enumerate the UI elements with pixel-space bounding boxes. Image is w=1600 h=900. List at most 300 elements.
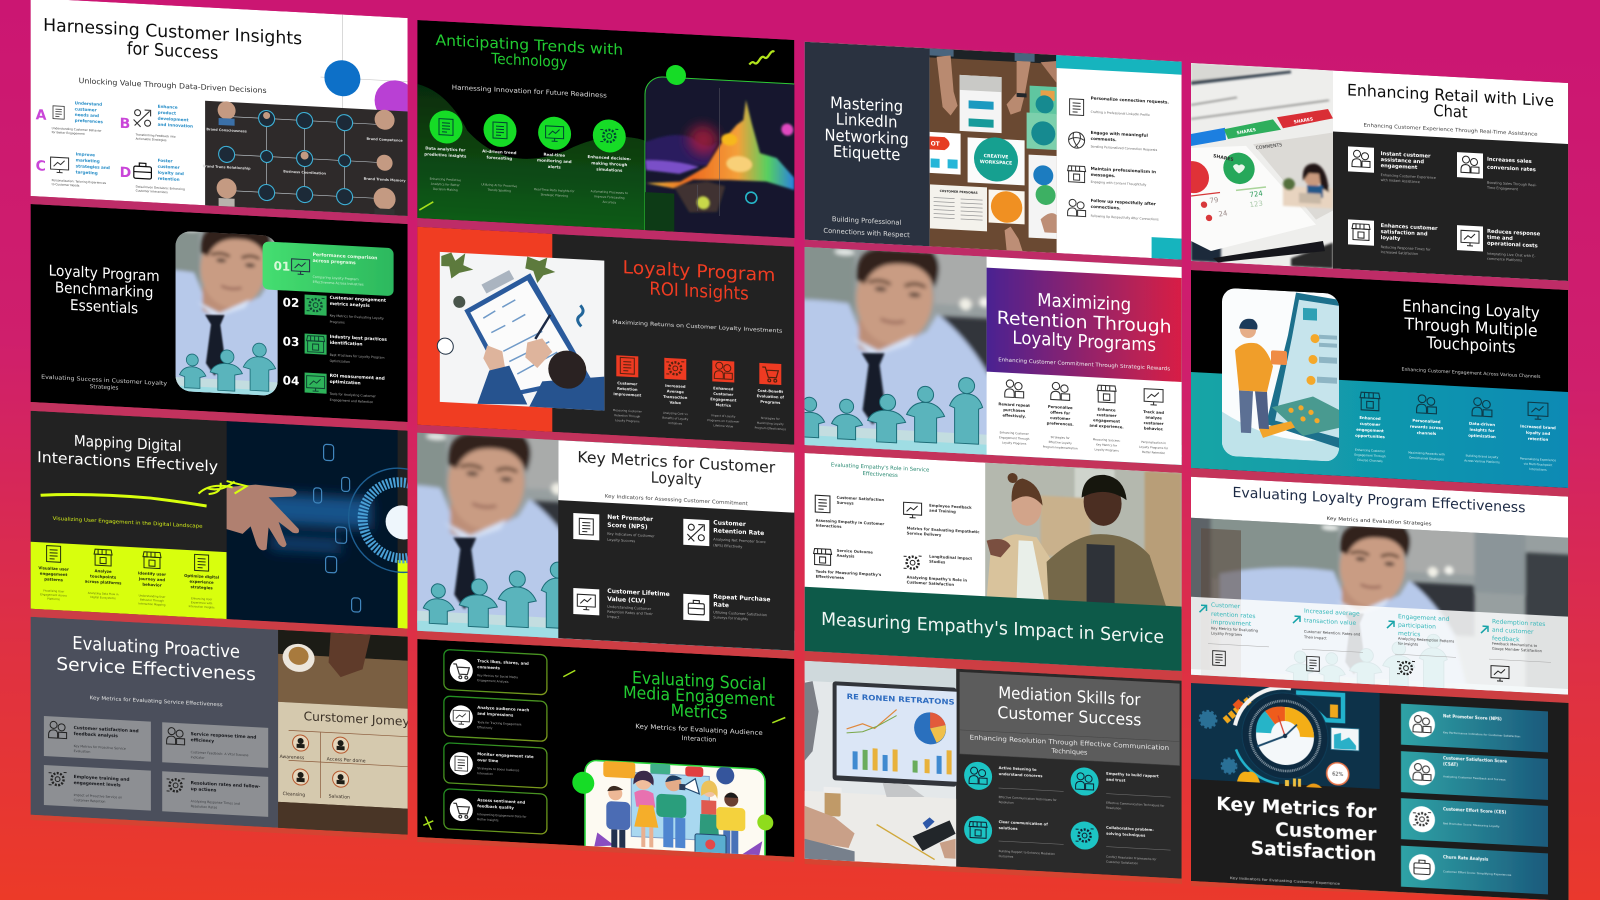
item grid: Surveys (837, 500, 854, 506)
metric cards: Customer Effort Score (CES) (1443, 806, 1506, 815)
item labels: Personalize (1048, 404, 1073, 410)
metric column 2: Their Impact (1303, 635, 1327, 641)
metric column 2 (1293, 607, 1363, 674)
panel: Evaluating Social Media slide (417, 639, 794, 891)
item details: Program Effectiveness (755, 426, 786, 431)
item labels: preferences. (1047, 420, 1074, 427)
item 02: Programs (330, 320, 345, 325)
item labels: offers for (1050, 410, 1070, 416)
title (997, 682, 1141, 730)
item grid: Service Outcome (837, 548, 873, 555)
title: LinkedIn (836, 110, 897, 132)
image: man with office background (1109, 462, 1600, 746)
title (56, 632, 256, 686)
feature cards: Enhances customer (1381, 223, 1438, 232)
image: customer journey on table: Curstomer Jomey (304, 709, 410, 729)
item labels: Optimize digital (184, 573, 219, 580)
item B: Enhance (158, 104, 178, 110)
metric cards: Analyzing Customer Feedback and Surveys (1443, 774, 1506, 782)
list cards: Assess sentiment and (477, 797, 526, 805)
highlighted item 01: 01 (274, 259, 290, 274)
item labels: Enhanced (713, 386, 734, 391)
item details: Strategies for (761, 416, 781, 421)
metric cards: Rate (713, 601, 729, 609)
subtitle: Techniques (1050, 747, 1088, 757)
metric cards: Analyzing Response Times and (191, 799, 240, 806)
item 04: optimization (330, 379, 361, 386)
title: ROI Insights (649, 279, 749, 305)
metric column 3: Analyzing Redemption Patterns (1398, 637, 1454, 644)
list cards: over time (477, 757, 499, 763)
item 03 (283, 331, 387, 366)
item details (999, 430, 1169, 455)
metric cards: Employee training and (74, 774, 130, 783)
metric cards: Net Promoter (607, 514, 653, 523)
skill items: Clear communication of (999, 820, 1048, 827)
title: Key Metrics for Customer (577, 449, 776, 477)
panel: Key Metrics for Customer Satisfaction slide (1191, 683, 1568, 900)
item labels (424, 145, 631, 173)
item details: Strategies for (1051, 435, 1071, 440)
metric cards: Analyzing Net Promoter Score (713, 537, 766, 544)
item labels: retention (1528, 436, 1548, 442)
title: Loyalty Program (49, 263, 160, 285)
title: Chat (1433, 101, 1468, 122)
item details: Engagement Through (999, 435, 1030, 441)
item grid: Analyzing Empathy's Role in (907, 574, 967, 583)
image: clipboard from above (437, 252, 604, 411)
title: Mediation Skills for (998, 682, 1141, 710)
item details: Building Brand Loyalty (1466, 454, 1499, 459)
metric column 2: transaction value (1304, 617, 1356, 627)
item B (120, 104, 193, 142)
item details: Digital Ecosystems (90, 595, 116, 600)
item grid: Customer Satisfaction (907, 579, 954, 587)
image: customer journey on table: Cleansing (283, 791, 305, 798)
item details: Omnichannel Strategies (1409, 456, 1444, 461)
image: blurred analytics screen: 123 (1249, 200, 1264, 209)
item labels: Increased (665, 384, 686, 389)
feature cards: conversion rates (1487, 165, 1536, 173)
item details: Interactions (1529, 467, 1547, 472)
side panel (805, 42, 930, 246)
list cards: comments (477, 664, 501, 670)
image: hand and digital interface (227, 421, 453, 631)
metric cards: Score (NPS) (607, 522, 648, 531)
item details: Maximizing Rewards with (1408, 451, 1445, 456)
item D: retention (158, 176, 180, 182)
item labels: predictive insights (424, 151, 467, 159)
image: customer journey on table (278, 630, 410, 835)
title: Evaluating Proactive (72, 633, 240, 663)
feature cards: Reduces response (1487, 229, 1541, 238)
teal band (1191, 372, 1568, 488)
title header (960, 672, 1180, 750)
feature cards: operational costs (1487, 241, 1538, 249)
image: man with paper figures (176, 232, 278, 396)
item details: Analyzing Data Flow in (88, 591, 119, 596)
metric cards: engagement levels (74, 780, 121, 788)
metric column 3: metrics (1398, 630, 1420, 638)
subtitle: Enhancing Customer Engagement Across Various Channels (1401, 367, 1541, 380)
metric column 1 (1200, 601, 1269, 668)
metric cards: (CSAT) (1443, 761, 1458, 767)
item D (120, 158, 185, 194)
list cards (444, 649, 547, 834)
item details: Loyalty Programs (1002, 440, 1027, 446)
item labels: Real-time (543, 152, 565, 158)
icons row (616, 355, 781, 385)
item details: Loyalty Programs (615, 418, 640, 424)
subtitle: Evaluating Success in Customer Loyalty (41, 375, 168, 387)
item 02: Customer engagement (330, 295, 386, 304)
item labels: customer (1360, 421, 1380, 427)
item details: Decision-Making (433, 187, 458, 192)
panel: Evaluating Loyalty Program Effectiveness slide (1109, 462, 1600, 746)
skill items: Effective Communication Techniques for (999, 795, 1058, 802)
item details: Enhancing Customer (1000, 430, 1030, 436)
title: Satisfaction (1251, 838, 1376, 866)
image: blurred analytics screen: SHARES (1213, 153, 1234, 163)
image: customer journey on table: Access Per dome (327, 756, 366, 764)
title: Essentials (70, 297, 138, 318)
subtitle: Enhancing Resolution Through Effective Communication (970, 733, 1169, 752)
item details: Automating Processes to (591, 189, 628, 195)
item details: Benefits of Loyalty (662, 416, 689, 421)
list items: messages. (1091, 172, 1116, 178)
item 03: Industry best practices (330, 334, 387, 343)
teal bar (1056, 55, 1182, 75)
list cards: Strategies to Boost Audience (477, 766, 519, 772)
item labels: optimization (1468, 433, 1496, 439)
metric cards: Key Performance Indicators for Customer Satisfaction (1443, 730, 1521, 738)
item labels: journey and (138, 576, 165, 582)
item details: Program Implementation (1043, 445, 1078, 450)
green footer band (805, 587, 1182, 672)
item 03: Best Practices for Loyalty Program (330, 353, 384, 360)
item 03: Optimization (330, 359, 350, 364)
title: Retention Through (997, 308, 1172, 338)
list cards: Track likes, shares, and (477, 658, 529, 666)
list cards: Engagement Analysis (477, 678, 509, 684)
gradient banner (987, 268, 1182, 382)
title: Loyalty Program (623, 258, 775, 286)
title: Customer Success (997, 702, 1141, 730)
title: Evaluating Loyalty Program Effectiveness (1233, 485, 1526, 516)
metric cards: Key Indicators of Customer (607, 532, 655, 538)
subtitle (824, 216, 910, 238)
skill items: understand concerns (999, 772, 1043, 778)
item labels: purchases (1003, 407, 1026, 413)
item details: Trends Spotting (487, 188, 511, 193)
title: Benchmarking (55, 280, 153, 302)
list cards: and impressions (477, 711, 514, 718)
image: workspace table: CUSTOMER PERSONAS (940, 189, 978, 195)
metric column 1: Loyalty Programs (1211, 631, 1242, 637)
metric column 1: Customer (1211, 602, 1241, 610)
item details: Analytics for Better (431, 182, 461, 187)
icons row (1005, 380, 1163, 405)
image: workspace table (930, 48, 1057, 253)
item labels: engagement (1356, 427, 1384, 433)
metric cards: Customer Satisfaction Score (1443, 755, 1507, 764)
skill items: Collaborative problem- (1106, 826, 1154, 832)
title: Mapping Digital (74, 433, 181, 455)
metric column 1: Key Metrics for Evaluating (1211, 626, 1258, 633)
item details: Utilizing AI for Proactive (481, 182, 517, 188)
item labels: Analyze (95, 568, 112, 574)
item grid: and Training (929, 508, 956, 514)
title (623, 258, 775, 306)
image: blurred analytics screen: SHARES (1236, 127, 1257, 136)
metric cards: Net Promoter Score: Measuring Loyalty (1443, 821, 1500, 828)
teal corner block (1152, 237, 1182, 260)
metric cards: Utilizing Customer Satisfaction (713, 610, 767, 617)
metric column 4: and customer (1492, 627, 1534, 636)
title (577, 449, 776, 493)
image: customer journey on table: Salvation (329, 793, 350, 801)
item 03: identification (330, 340, 362, 348)
item labels: Average (667, 389, 684, 394)
metric cards: Net Promoter Score (NPS) (1443, 713, 1502, 721)
list cards: Tools for Tracking Engagement (476, 720, 522, 727)
item grid: Service Delivery (907, 530, 942, 537)
item details: Experience with (191, 600, 213, 605)
metric cards: feedback analysis (74, 731, 118, 739)
metric cards: (NPS) Effectively (713, 543, 742, 549)
list items (1068, 94, 1169, 222)
list items: comments. (1091, 136, 1117, 142)
item A: preferences (75, 118, 103, 124)
image: workspace table: CREATIVE (984, 153, 1008, 160)
title: Etiquette (833, 142, 900, 164)
item B: Actionable Strategies (136, 137, 167, 142)
item labels: Metrics (716, 403, 732, 408)
item grid: Metrics for Evaluating Empathetic (907, 525, 980, 534)
skill items: Active listening to (999, 766, 1037, 772)
title (1402, 296, 1540, 358)
green dots (572, 771, 773, 831)
icons row (47, 546, 209, 571)
metric cards (573, 512, 770, 627)
item labels: Cost-Benefit (757, 389, 783, 394)
feature cards: satisfaction and (1381, 229, 1428, 238)
metric column 4: Redemption rates (1492, 618, 1545, 628)
feature cards: Enhancing Customer Experience (1381, 173, 1436, 180)
item D: loyalty and (158, 170, 184, 176)
metric cards: Service response time and (191, 731, 256, 741)
feature cards (1348, 146, 1541, 264)
metric column 4 (1481, 618, 1551, 684)
panel: Loyalty Program ROI slide (417, 227, 794, 445)
subtitle: Strategies (90, 384, 118, 392)
metric cards: Customer Effort Score: Simplifying Experiences (1443, 869, 1512, 877)
metric column 4: feedback (1492, 635, 1520, 644)
panel: Mapping Digital Interactions slide (31, 411, 453, 631)
list items: Following Up Respectfully After Connections (1091, 214, 1159, 221)
image: customer network: Business Coordination (283, 169, 327, 176)
title (44, 18, 302, 59)
item B: B (120, 116, 130, 132)
item labels: opportunities (1355, 433, 1386, 439)
image: blurred analytics screen (1177, 62, 1333, 269)
image: community illustration (585, 759, 765, 889)
item grid: Longitudinal Impact (929, 554, 972, 561)
subtitle: Key Metrics for Evaluating Audience (635, 722, 763, 737)
item details: Enhancing User (191, 596, 213, 601)
item 02: Key Metrics for Evaluating Loyalty (330, 314, 384, 320)
item B: and innovation (158, 122, 193, 129)
item D: customer (158, 164, 181, 170)
item labels: Evaluation of (757, 394, 784, 400)
item details: Interaction Insights (189, 604, 215, 609)
metric column 3: for Insights (1398, 642, 1418, 647)
metric cards: Impact of Proactive Service on (74, 793, 122, 800)
item labels: simulations (596, 166, 623, 173)
metric cards: efficiency (191, 737, 214, 744)
metric column 3 (1387, 613, 1456, 677)
metric cards: Understanding Customer (607, 605, 652, 611)
title: Key Metrics for (1216, 794, 1377, 823)
item labels: customer (1050, 415, 1070, 421)
skill items (964, 761, 1171, 867)
skill items: Resolution (1106, 806, 1121, 810)
item labels: Value (670, 401, 682, 405)
title: Maximizing (1037, 290, 1131, 316)
item labels: making through (591, 160, 627, 167)
image: customer network: Brand Trans Relationship (203, 164, 251, 171)
item details: Engagement Through (1354, 453, 1386, 458)
image: office monitor (805, 661, 957, 867)
subtitle: Visualizing User Engagement in the Digital Landscape (53, 516, 203, 530)
decorative ticks (423, 662, 785, 849)
metric cards: Retention Rate (713, 527, 764, 537)
skill items: solutions (999, 826, 1018, 831)
item details: Maximizing Loyalty (757, 421, 784, 426)
item labels: rewards across (1410, 424, 1444, 430)
icons row (430, 110, 626, 154)
title: for Success (127, 37, 218, 63)
list cards: feedback quality (477, 803, 514, 810)
item B: Transforming Feedback into (135, 133, 176, 139)
metric cards: Evaluation (74, 749, 90, 754)
item labels: Improvement (613, 392, 641, 398)
item labels: Transaction (663, 395, 688, 400)
item C (36, 152, 110, 187)
item details (40, 588, 215, 609)
image: customer network: Brand Consciousness (206, 127, 247, 133)
title: Loyalty Programs (1012, 328, 1156, 356)
list items: connections. (1091, 204, 1121, 210)
subtitle: Interaction (682, 734, 716, 744)
feature cards: Reducing Response Times for (1381, 245, 1431, 252)
item grid: Tools for Measuring Empathy's (816, 569, 882, 577)
item details: Interaction Mapping (139, 601, 166, 607)
item labels: Retention (617, 387, 638, 392)
metric cards: Customer satisfaction and (74, 725, 139, 734)
item grid: Studies (929, 559, 946, 564)
item labels: engagement (40, 571, 68, 577)
item labels: effectively. (1002, 412, 1027, 419)
image: customer network: Brand Competence (366, 137, 403, 143)
item details: Understanding User (139, 593, 166, 599)
metric column 1: retention rates (1211, 611, 1256, 620)
translucent metrics band (1191, 597, 1568, 695)
item D: Foster (158, 158, 173, 164)
item 04: Engagement and Retention (330, 398, 373, 404)
white header (558, 440, 794, 513)
subtitle: Unlocking Value Through Data-Driven Decisions (79, 76, 267, 95)
squiggle (749, 50, 774, 66)
metric cards: Customer Retention (74, 798, 105, 804)
item labels: Enhanced (1359, 415, 1381, 421)
item labels: across platforms (85, 579, 122, 586)
metric cards (44, 716, 268, 817)
item labels: behavior (142, 582, 162, 588)
subtitle: Key Metrics for Evaluating Service Effectiveness (90, 695, 223, 708)
item labels (613, 381, 784, 411)
dark panel (1333, 132, 1568, 281)
item B: development (158, 116, 188, 122)
item details: Platforms (47, 597, 61, 601)
subtitle: Maximizing Returns on Customer Loyalty Investments (612, 320, 783, 335)
highlighted item 01 (263, 241, 394, 296)
image: workspace table: WORKSPACE (980, 159, 1012, 167)
item details: Measuring Success: (1093, 437, 1120, 443)
image: performance gauge: 62% (1332, 771, 1343, 778)
item labels: insights for (1469, 427, 1495, 433)
title (997, 288, 1172, 357)
item details: Initiatives (668, 421, 683, 426)
decorative circles (320, 14, 408, 119)
feature cards: Time Engagement (1486, 186, 1519, 191)
title: Interactions Effectively (37, 450, 219, 476)
item labels: Increased brand (1520, 423, 1556, 430)
item details: Loyalty Programs for (1139, 445, 1169, 450)
item details: Lifetime Value (713, 423, 734, 428)
item A: Understanding Customer Behavior (52, 126, 102, 133)
item details: Enhancing Predictive (430, 177, 461, 182)
item labels: Personalized (1412, 418, 1441, 424)
title (37, 431, 219, 476)
metric cards: Repeat Purchase (713, 593, 770, 603)
list items: Sending Personalized Connection Requests (1091, 144, 1158, 152)
panel: Mastering LinkedIn slide (805, 42, 1182, 260)
item details: Personalization in (1141, 440, 1166, 445)
feature cards: Integrating Live Chat with E- (1487, 252, 1536, 258)
image: man with paper figures (585, 175, 1225, 509)
item grid: Effectiveness (816, 574, 845, 580)
image: man with paper figures (176, 360, 816, 694)
panel: Loyalty Program Benchmarking slide (30, 204, 408, 422)
subtitle band (960, 730, 1180, 766)
item labels: patterns (44, 576, 64, 582)
item labels: Data-driven (1469, 421, 1495, 427)
item labels: engagement (1093, 417, 1120, 424)
item labels: Enhance (1098, 407, 1116, 413)
item grid: Analysis (837, 553, 855, 559)
title: Loyalty (651, 469, 702, 489)
item labels: monitoring and (537, 157, 572, 164)
green background curve (417, 84, 817, 239)
list items: Engaging with Content Thoughtfully (1091, 180, 1147, 187)
item details: Strategic Planning (541, 193, 568, 198)
title: Media Engagement (623, 682, 775, 710)
image: two people in warehouse (985, 463, 1182, 609)
panel: Enhancing Loyalty Touchpoints slide (1191, 270, 1568, 488)
metric column 3: Engagement and (1398, 613, 1450, 623)
item details: Personalizing Experience (1520, 456, 1556, 462)
